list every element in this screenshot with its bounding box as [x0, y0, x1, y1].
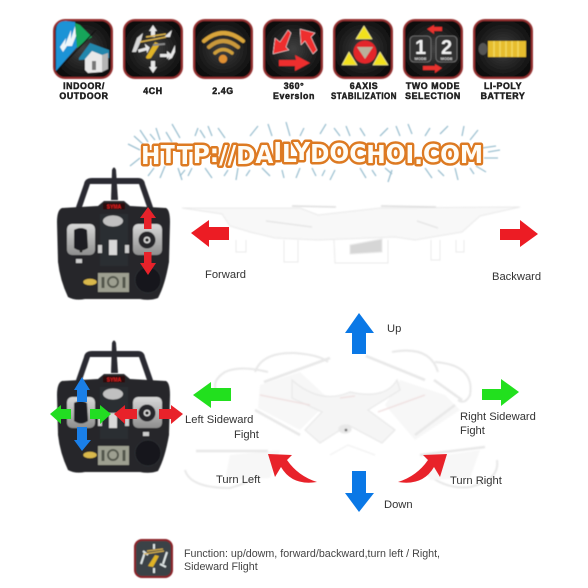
function line two: Sideward Flight: [184, 561, 258, 573]
controller body: [57, 374, 170, 473]
drone: three-quarter view: [185, 351, 497, 488]
label: left sideward: Left Sideward: [185, 414, 253, 426]
label: forward: Forward: [205, 269, 246, 281]
label: two mode: TWO MODE: [406, 81, 460, 91]
function line one: Function: up/dowm, forward/backward,turn left / Right,: [184, 548, 440, 560]
controller centre panel: [100, 387, 128, 439]
icon: two mode selection: MODE: [414, 56, 427, 61]
small switches: [98, 418, 149, 436]
label: battery: BATTERY: [481, 91, 525, 101]
arrow: right sideward: [482, 379, 519, 406]
label: right sideward fight: Fight: [460, 425, 486, 437]
controller: forward/backward: [57, 168, 170, 300]
label: turn right: Turn Right: [450, 475, 503, 487]
icon: indoor / outdoor: [54, 20, 112, 78]
label: backward: Backward: [492, 271, 541, 283]
arrow: left sideward: [193, 382, 231, 408]
controller handle: [75, 178, 154, 210]
arrow: stick down: [74, 427, 91, 451]
label: indoor/outdoor: INDOOR/: [63, 81, 105, 91]
controller body: [57, 201, 170, 300]
label: up: Up: [387, 323, 401, 335]
left gimbal: [67, 397, 95, 428]
drone camera: [350, 239, 382, 254]
watermark lettering: HTTP://DAILYDOCHOI.COM: [141, 137, 483, 170]
label: turn left: Turn Left: [216, 474, 261, 486]
label: stabilization: STABILIZATION: [331, 91, 397, 101]
drone rotor guards and arms: [182, 207, 520, 240]
label: li-poly: LI-POLY: [484, 81, 522, 91]
speaker: [135, 267, 161, 293]
LCD screen: [98, 273, 129, 292]
icon: two mode selection: [404, 20, 462, 78]
watermark: website url: [128, 122, 500, 182]
drone: side view: [182, 206, 520, 263]
arrow: right stick right: [159, 405, 183, 424]
icon: 4CH: [124, 20, 182, 78]
arrow: controller stick up: [140, 207, 156, 229]
controller brand display: SYMA: [107, 378, 122, 384]
right gimbal: [133, 224, 162, 255]
icon: 360 eversion: [264, 20, 322, 78]
label: right sideward: Right Sideward: [460, 411, 536, 423]
left gimbal: [67, 224, 95, 255]
icon: 2.4G wifi: [194, 20, 252, 78]
icon: two mode selection: 1: [415, 37, 426, 59]
icon: function helicopter: [135, 540, 172, 577]
center switch: [109, 413, 117, 428]
small switches: [76, 245, 129, 263]
label: selection: SELECTION: [405, 91, 461, 101]
arrow: stick up: [74, 377, 90, 402]
icon: two mode selection: MODE: [440, 56, 453, 61]
label: down: Down: [384, 499, 413, 511]
label: 2.4G: 2.4G: [212, 86, 234, 96]
drone wing fills: [225, 372, 480, 480]
label: 4CH: 4CH: [143, 86, 163, 96]
icon row: [54, 20, 532, 78]
2.4G logo badge: [83, 451, 97, 459]
arrow: turn right: [398, 454, 447, 483]
label: outdoor: OUTDOOR: [59, 91, 109, 101]
label: left sideward fight: Fight: [234, 429, 260, 441]
controller brand display: SYMA: [107, 204, 122, 210]
arrow: stick left: [50, 405, 71, 424]
label: 360 degrees: 360°: [284, 81, 304, 91]
arrow: backward: [500, 220, 538, 247]
icon labels: [59, 81, 525, 101]
arrow: forward: [191, 220, 229, 247]
drone camera: [339, 425, 351, 433]
icon: li-poly battery: [474, 20, 532, 78]
controller power button: [103, 216, 123, 226]
label: 6 axis: 6AXIS: [350, 81, 378, 91]
icon: two mode selection: 2: [441, 37, 452, 59]
controller: full directions: [57, 340, 170, 473]
drone body: [292, 380, 400, 443]
drone arms: [196, 356, 485, 455]
function description: [184, 548, 440, 573]
watermark spiky burst: [128, 122, 500, 182]
rotor guards: [215, 351, 471, 402]
drone landing gear: [236, 240, 464, 263]
controller antenna: [111, 168, 118, 200]
arrow: controller stick down: [140, 252, 156, 275]
speaker: [135, 440, 161, 466]
LCD screen: [98, 446, 129, 465]
center switch: [109, 240, 117, 255]
controller power button: [103, 388, 123, 400]
arrow: stick right: [90, 405, 111, 424]
right gimbal: [133, 397, 162, 428]
arrow: turn left: [268, 454, 317, 483]
arrow: up: [345, 313, 374, 354]
arrow: down: [345, 471, 374, 512]
controller handle: [75, 351, 154, 383]
controller centre panel: [100, 214, 128, 266]
arrow: right stick left: [114, 405, 137, 424]
2.4G logo badge: [83, 278, 97, 286]
icon: 6 axis stabilization: [334, 20, 392, 78]
label: eversion: Eversion: [273, 91, 315, 101]
controller antenna: [111, 340, 118, 373]
